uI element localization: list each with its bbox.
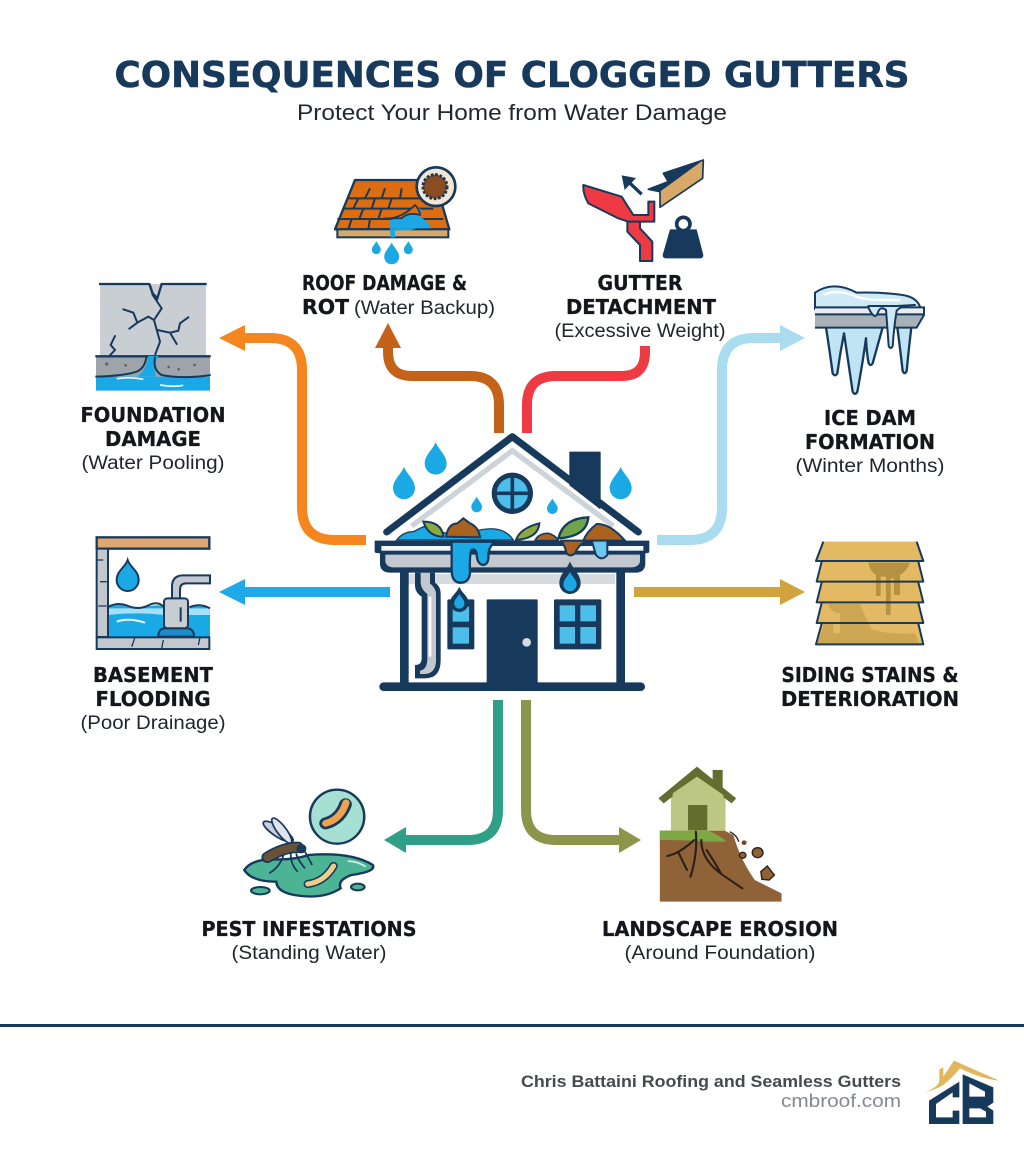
icon: ice dam [815,286,924,394]
arrow: to siding stains [634,579,805,605]
footer company name: Chris Battaini Roofing and Seamless Gutters [521,1072,901,1091]
label: ice dam formation: FORMATION [805,430,935,454]
label: basement flooding [80,663,226,734]
icon: pests and standing water [244,790,373,896]
arrow: to pest infestations [384,700,498,853]
subtitle: Protect Your Home from Water Damage [297,100,727,125]
footer website: cmbroof.com [781,1091,901,1111]
logo: CB house [924,1061,999,1124]
label: basement flooding: FLOODING [96,687,210,711]
label: foundation damage: FOUNDATION [80,403,226,427]
label: landscape erosion: LANDSCAPE EROSION [602,917,838,941]
label: ice dam formation [796,406,944,477]
label: gutter detachment [554,271,726,342]
label: landscape erosion [602,917,838,964]
icon: central house with clogged gutter [375,437,649,691]
label: foundation damage: DAMAGE [105,427,201,451]
arrow: to basement flooding [219,579,390,605]
icon: basement flooding [97,537,210,649]
arrow: to roof damage [375,323,499,433]
label: ice dam formation: ICE DAM [824,406,916,430]
icon: foundation damage [95,284,211,391]
label: roof damage: ROOF DAMAGE & [302,271,467,295]
label: ice dam formation: (Winter Months) [796,456,944,477]
label: gutter detachment: GUTTER [598,271,682,295]
arrow: to landscape erosion [526,700,641,853]
arrow: to gutter detachment [527,346,645,433]
icon: gutter detachment [583,160,703,261]
label: siding stains: SIDING STAINS & [782,663,958,687]
label: pest infestations [202,917,416,964]
label: foundation damage: (Water Pooling) [82,453,224,474]
label: siding stains [781,663,959,711]
icon: roof damage [335,167,455,264]
title: CONSEQUENCES OF CLOGGED GUTTERS [114,55,910,96]
icon: landscape erosion [658,767,782,902]
footer divider [0,1024,1024,1027]
label: gutter detachment: (Excessive Weight) [554,321,726,342]
label: pest infestations: (Standing Water) [232,943,386,964]
label: basement flooding: (Poor Drainage) [80,713,226,734]
label: pest infestations: PEST INFESTATIONS [202,917,416,941]
arrow: to foundation damage [219,325,366,540]
label: landscape erosion: (Around Foundation) [624,943,816,964]
label: gutter detachment: DETACHMENT [566,295,716,319]
label: siding stains: DETERIORATION [781,687,959,711]
label: roof damage [302,271,495,319]
icon: siding stains [816,542,923,644]
label: basement flooding: BASEMENT [93,663,213,687]
label: roof damage: (Water Backup) [354,298,495,319]
arrow: to ice dam [657,325,805,540]
label: foundation damage [80,403,226,474]
label: roof damage: ROT [302,295,349,319]
